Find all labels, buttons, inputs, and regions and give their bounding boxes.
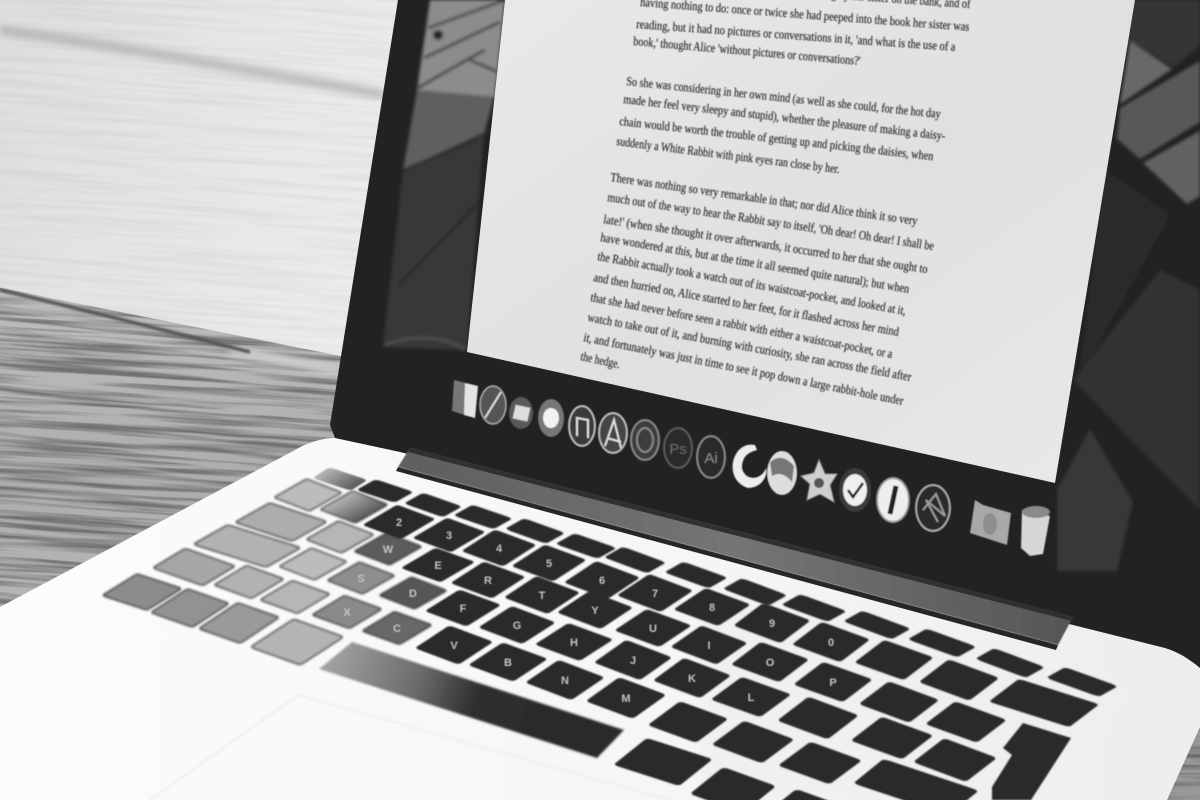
icon: illustrator xyxy=(697,436,725,478)
key legends: B xyxy=(504,657,512,669)
icon: illustrator: Ai xyxy=(704,450,718,467)
book text: the Rabbit actually took a watch out of its waistcoat-pocket, and looked at it, xyxy=(596,249,907,318)
key legends: 7 xyxy=(652,588,658,600)
keyboard xyxy=(102,467,1118,800)
icon: mail xyxy=(509,397,533,429)
icon: finder xyxy=(452,380,478,418)
key legends: 3 xyxy=(446,530,452,542)
key legends: 5 xyxy=(546,558,552,570)
key legends: E xyxy=(434,560,442,572)
key legends: 2 xyxy=(396,517,402,529)
key legends: G xyxy=(513,620,521,632)
application dock xyxy=(452,380,1050,556)
laptop lid bezel and reflections xyxy=(330,0,1200,672)
display hinge xyxy=(396,448,1073,650)
trackpad xyxy=(150,695,670,800)
key legends: L xyxy=(748,692,755,704)
icon: crescent xyxy=(733,445,766,488)
key legends: U xyxy=(649,623,657,635)
icon: safari xyxy=(480,386,506,424)
keyboard well xyxy=(700,590,1132,800)
icon: check xyxy=(839,468,871,512)
key legends: M xyxy=(621,693,631,705)
book text: it, and fortunately was just in time to see it pop down a large rabbit-hole under xyxy=(582,330,906,408)
key legends: 6 xyxy=(599,575,605,587)
function key row xyxy=(313,467,1118,697)
key legends: X xyxy=(343,607,351,619)
book text: There was nothing so very remarkable in that; nor did Alice think it so very xyxy=(610,170,919,228)
right bezel cobblestone reflection xyxy=(1057,0,1200,571)
key legends: C xyxy=(393,623,401,635)
key legends: 8 xyxy=(709,602,715,614)
key legends: N xyxy=(561,675,569,687)
key legends xyxy=(343,517,837,705)
book text: much out of the way to hear the Rabbit say to itself, 'Oh dear! Oh dear! I shall be xyxy=(607,190,935,253)
key legends: 9 xyxy=(769,618,775,630)
key legends: P xyxy=(829,677,837,689)
space bar xyxy=(319,642,624,758)
book text: that she had never before seen a rabbit with either a waistcoat-pocket, or a xyxy=(589,290,894,361)
book text: late!' (when she thought it over afterwards, it occurred to her that she ought to xyxy=(603,212,929,276)
light out-of-focus keys on the left xyxy=(102,479,447,665)
dark main keys xyxy=(362,505,1099,800)
e-book page on screen xyxy=(467,0,1135,483)
book text: reading, but it had no pictures or conversations in it, 'and what is the use of a xyxy=(636,17,956,54)
key legends: Y xyxy=(591,605,599,617)
key legends: K xyxy=(688,673,696,685)
icon: photos xyxy=(767,451,797,495)
key legends: I xyxy=(707,640,711,652)
book text: suddenly a White Rabbit with pink eyes ran close by her. xyxy=(616,134,841,176)
key legends: V xyxy=(450,640,458,652)
key legends: F xyxy=(460,603,467,615)
icon: info circle xyxy=(877,478,909,522)
book text: book,' thought Alice 'without pictures or conversations?' xyxy=(633,34,861,68)
book text: the hedge. xyxy=(579,349,621,371)
book text: have wondered at this, but at the time it all seemed quite natural); but when xyxy=(600,230,911,296)
book text: made her feel very sleepy and stupid), whether the pleasure of making a daisy- xyxy=(623,92,946,143)
key legends: R xyxy=(484,575,492,587)
key legends: S xyxy=(357,573,365,585)
key legends: 0 xyxy=(828,637,834,649)
icon: photoshop: Ps xyxy=(669,441,687,458)
key legends: T xyxy=(539,590,546,602)
icon: system preferences xyxy=(631,420,659,460)
icon: flower xyxy=(801,460,837,502)
icon: folder xyxy=(970,500,1011,545)
laptop base xyxy=(0,438,1200,800)
key legends: O xyxy=(766,657,775,669)
icon: white disc xyxy=(538,399,564,437)
icon: photoshop xyxy=(664,428,692,468)
icon: music xyxy=(569,406,595,446)
book text: and then hurried on, Alice started to her feet, for it flashed across her mind xyxy=(592,270,901,339)
book text: So she was considering in her own mind (as well as she could, for the hot day xyxy=(626,74,942,121)
icon: app store xyxy=(599,413,627,453)
book text: watch to take out of it, and burning with curiosity, she ran across the field after xyxy=(586,310,913,384)
key legends: J xyxy=(630,655,636,667)
book text: chain would be worth the trouble of getting up and picking the daisies, when xyxy=(619,114,935,163)
left bezel reflection xyxy=(383,0,505,350)
key legends: H xyxy=(570,637,578,649)
book text xyxy=(579,0,972,408)
icon: trash xyxy=(1021,506,1050,556)
key legends: 4 xyxy=(496,543,503,555)
icon: dark badge xyxy=(916,485,950,531)
key legends: D xyxy=(409,588,417,600)
key legends: W xyxy=(383,544,394,556)
